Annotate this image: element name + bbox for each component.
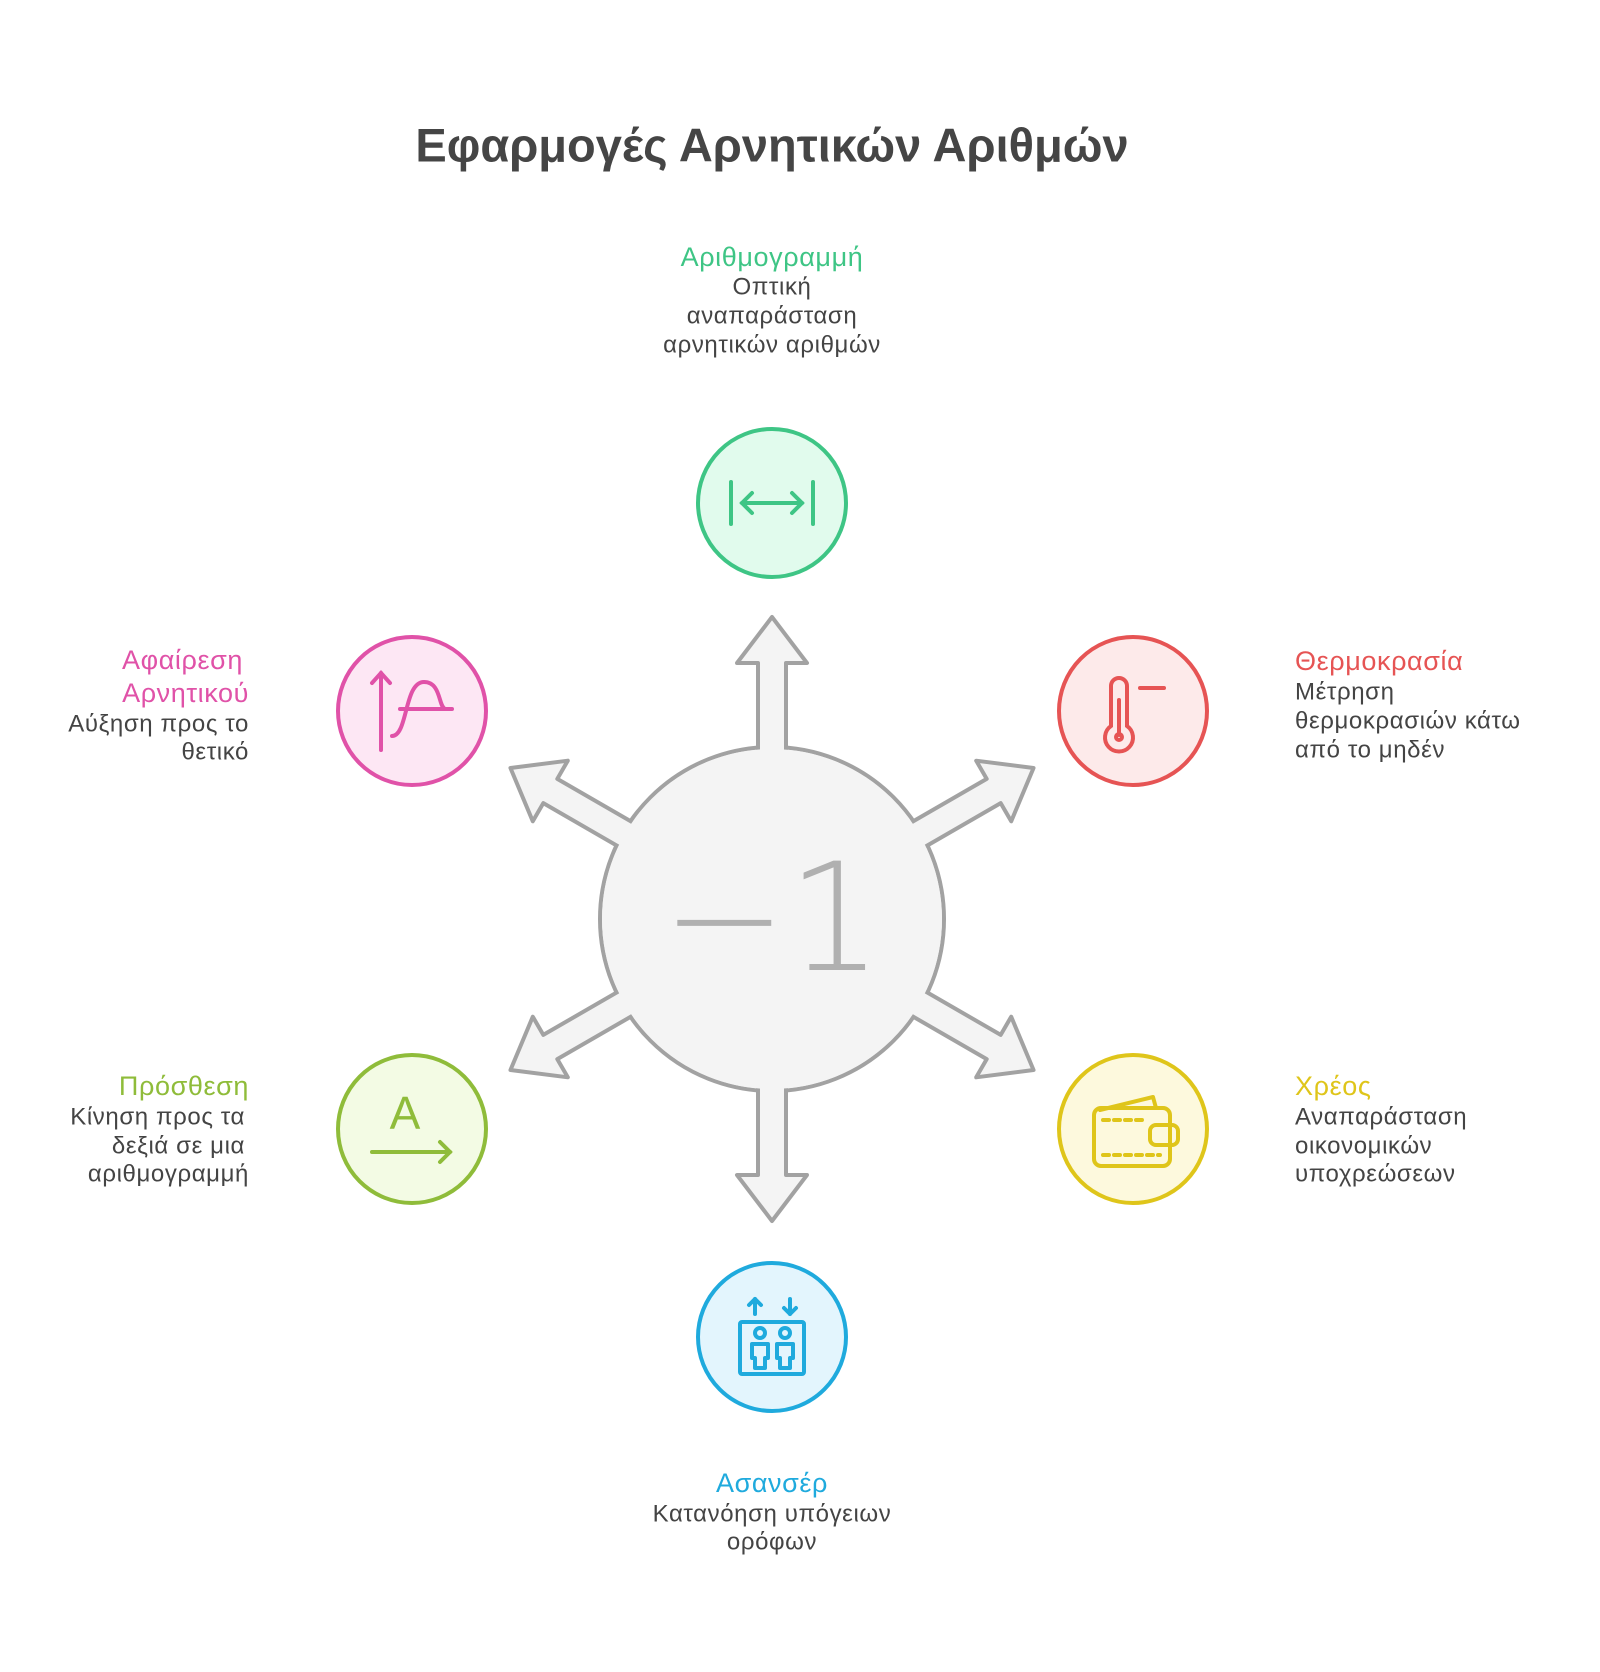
text: Αριθμογραμμή: Οπτική: [732, 274, 812, 300]
title: Εφαρμογές Αρνητικών Αριθμών: [415, 118, 1129, 172]
icon: letter A with arrow (lower left): A: [390, 1087, 421, 1139]
text: Θερμοκρασία: Μέτρηση: [1295, 678, 1395, 706]
text: Ασανσέρ: Ασανσέρ: [716, 1468, 828, 1498]
arrow: down: [737, 1069, 807, 1221]
text: Χρέος: υποχρεώσεων: [1295, 1160, 1456, 1188]
icon: elevator (bottom): [698, 1263, 846, 1411]
arrow: upper right: [884, 738, 1051, 874]
arrow: upper left: [493, 738, 660, 874]
text: Αριθμογραμμή: Αριθμογραμμή: [681, 242, 863, 272]
text: Αριθμογραμμή: [663, 242, 881, 358]
text: Πρόσθεση: [70, 1071, 249, 1188]
icon: wallet (lower right): [1059, 1055, 1207, 1203]
text: Χρέος: Αναπαράσταση: [1295, 1104, 1467, 1130]
text: Ασανσέρ: [653, 1468, 891, 1556]
text: Αριθμογραμμή: αναπαράσταση: [687, 302, 857, 330]
arrow: up: [737, 617, 807, 769]
text: Πρόσθεση: δεξιά σε μια: [112, 1132, 245, 1160]
text: Πρόσθεση: αριθμογραμμή: [88, 1160, 249, 1188]
text: Ασανσέρ: ορόφων: [727, 1528, 817, 1556]
icon: wave (upper left): [338, 637, 486, 785]
text: Χρέος: οικονομικών: [1295, 1132, 1432, 1160]
text: Αφαίρεση Αρνητικού: Αφαίρεση: [122, 645, 243, 675]
central hub with arrows: [493, 617, 1051, 1221]
icon: letter A with arrow (lower left): [338, 1055, 486, 1203]
central number: −1: [661, 832, 883, 1006]
text: Πρόσθεση: Πρόσθεση: [119, 1071, 249, 1101]
text: Αφαίρεση Αρνητικού: θετικό: [181, 738, 249, 766]
text: Θερμοκρασία: θερμοκρασιών κάτω: [1295, 708, 1521, 734]
icon: number line (top): [698, 429, 846, 577]
text: Θερμοκρασία: Θερμοκρασία: [1295, 646, 1463, 676]
text: Ασανσέρ: Κατανόηση υπόγειων: [653, 1500, 891, 1528]
icon: thermometer (upper right): [1059, 637, 1207, 785]
text: Χρέος: [1295, 1071, 1467, 1188]
text: Αφαίρεση Αρνητικού: Αρνητικού: [122, 678, 249, 708]
text: Αριθμογραμμή: αρνητικών αριθμών: [663, 332, 881, 358]
text: Πρόσθεση: Κίνηση προς τα: [70, 1104, 245, 1130]
text: Αφαίρεση Αρνητικού: [68, 645, 249, 766]
text: Χρέος: Χρέος: [1295, 1071, 1371, 1101]
text: Αφαίρεση Αρνητικού: Αύξηση προς το: [68, 710, 249, 738]
arrow: lower right: [884, 964, 1051, 1100]
text: Θερμοκρασία: από το μηδέν: [1295, 736, 1445, 764]
text: Θερμοκρασία: [1295, 646, 1521, 764]
arrow: lower left: [493, 964, 660, 1100]
